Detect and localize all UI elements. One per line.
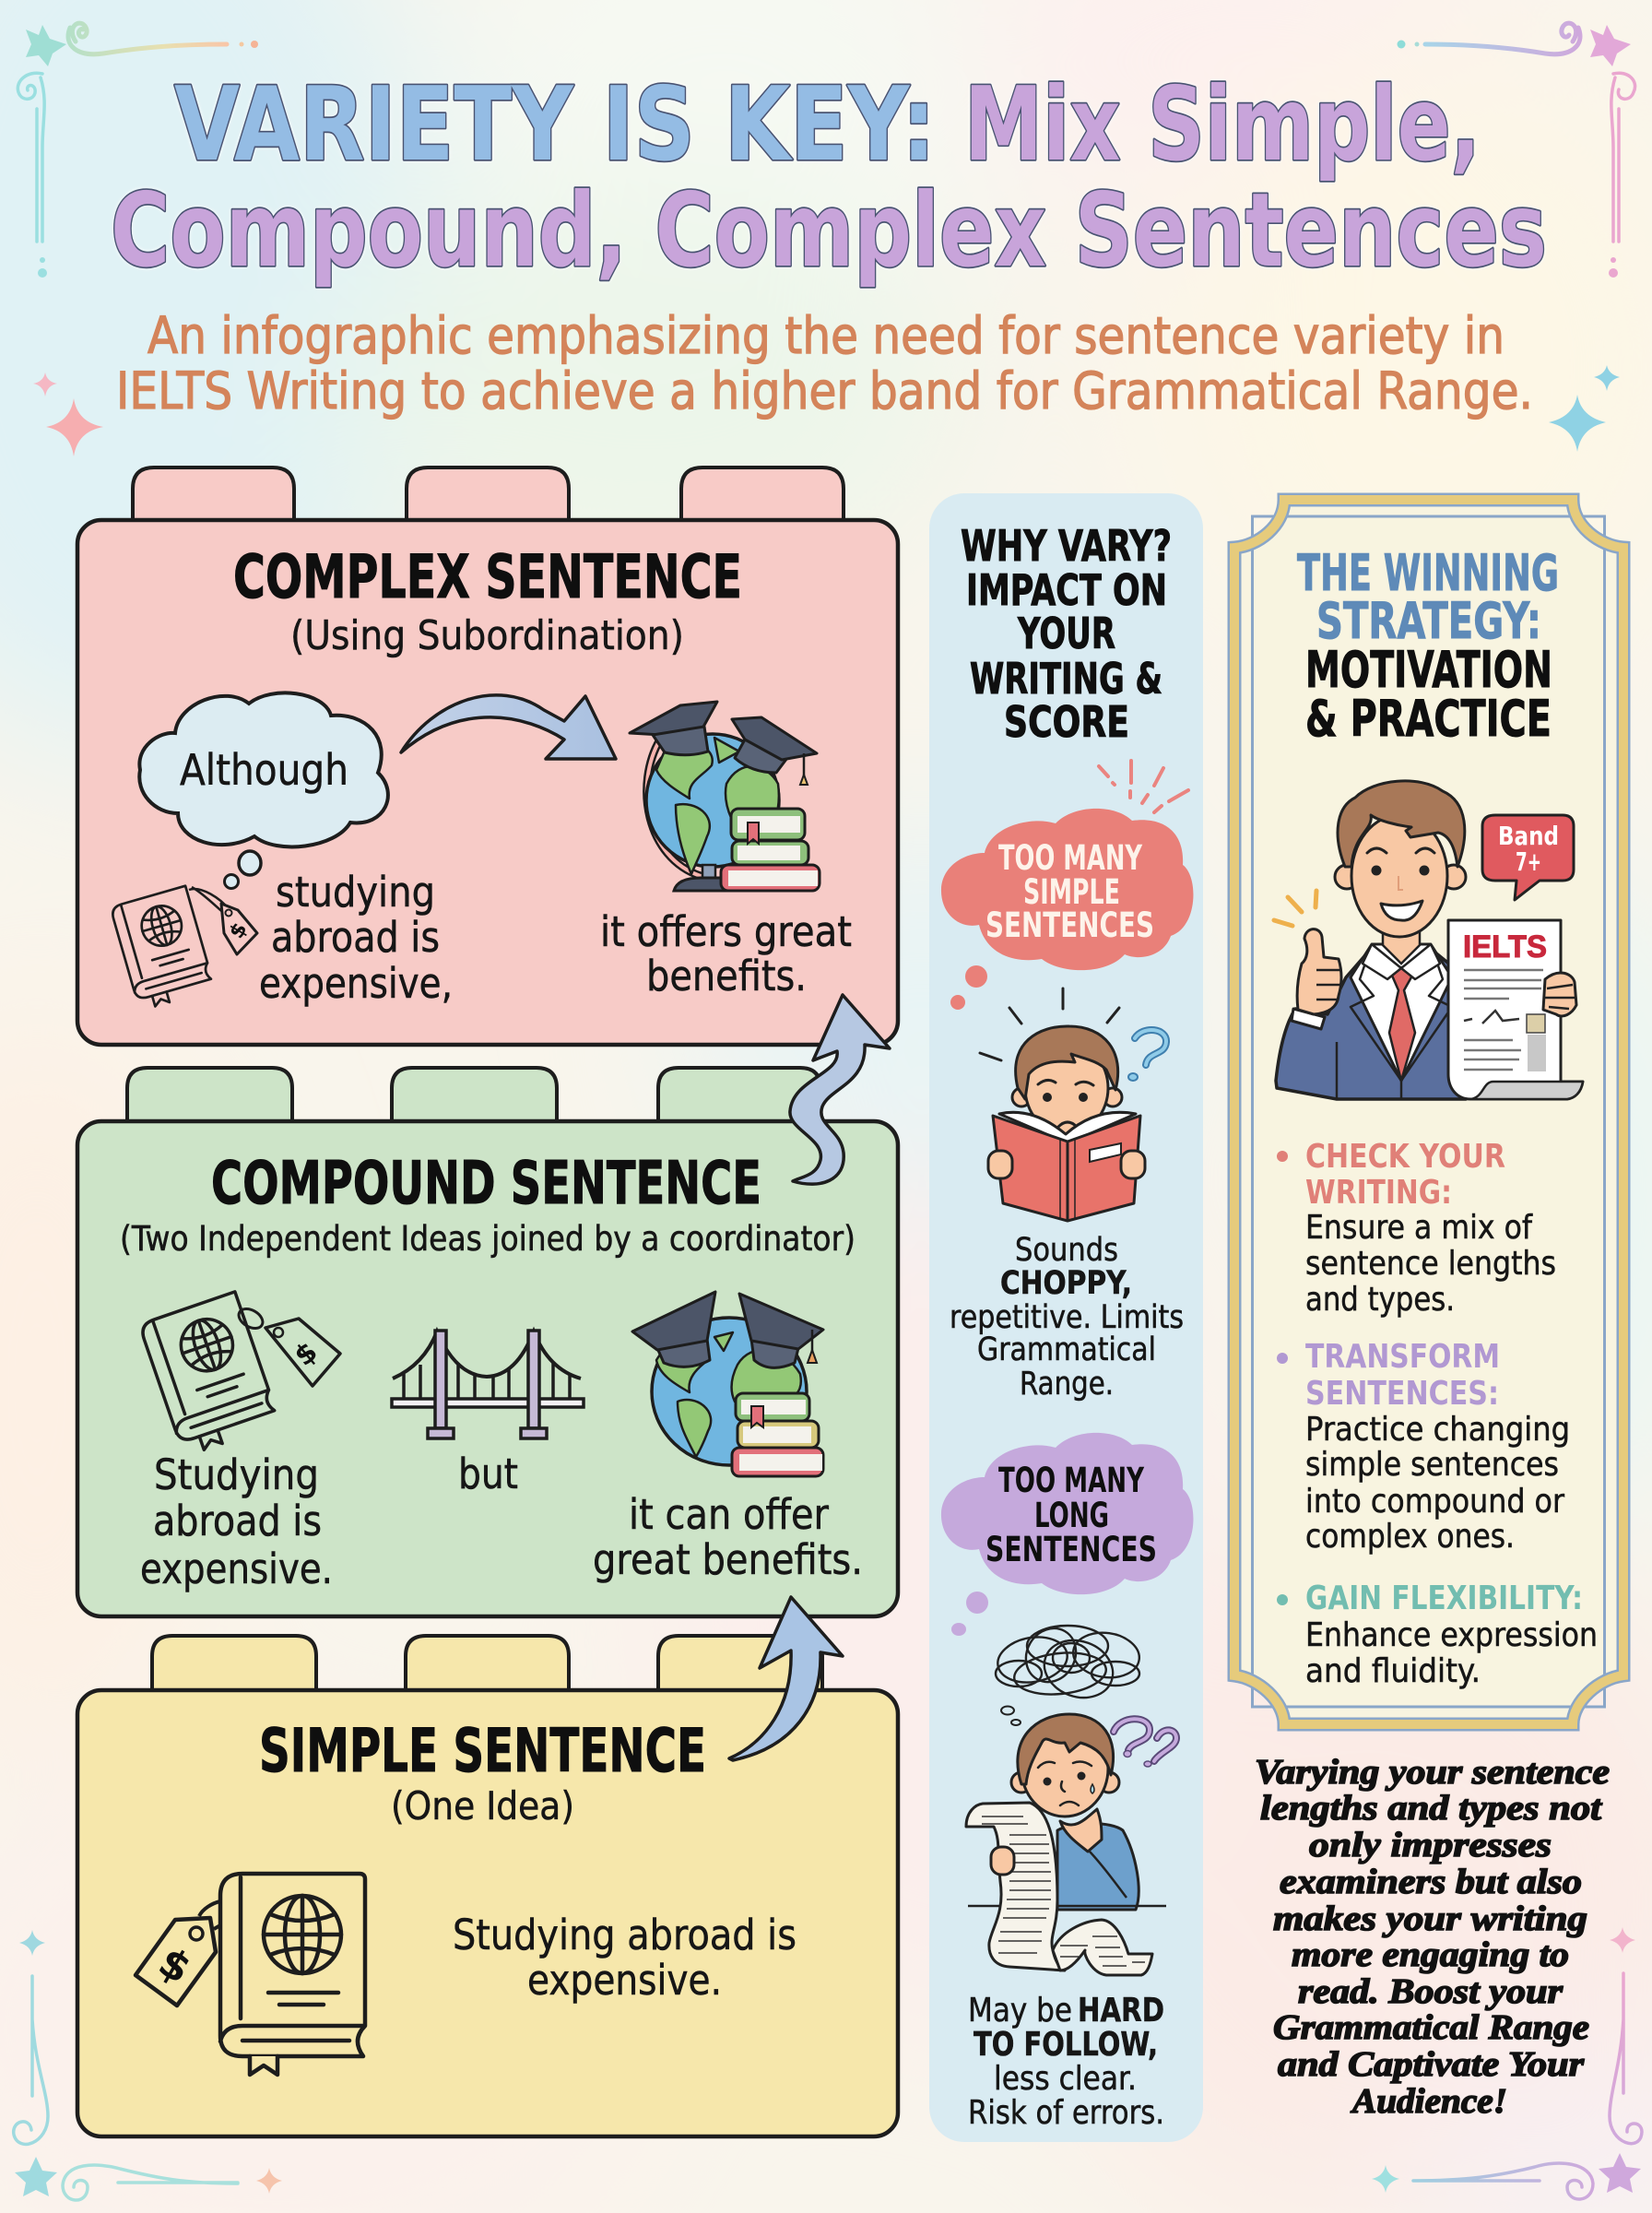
closing message: only impresses <box>1309 1826 1552 1864</box>
tip: transform sentences <box>1277 1338 1570 1556</box>
clause: studying abroad is expensive: expensive, <box>259 959 453 1008</box>
sentence: studying abroad is expensive <box>453 1911 796 2005</box>
why vary heading: IMPACT ON <box>966 565 1167 615</box>
closing message <box>1255 1753 1610 2121</box>
text: choppy effect: Sounds <box>1015 1232 1118 1269</box>
closing message: makes your writing <box>1273 1899 1587 1938</box>
icon: confused reader <box>980 988 1166 1221</box>
tip: gain flexibility <box>1277 1580 1598 1690</box>
panel: winning strategy <box>1234 500 1623 1724</box>
why vary heading <box>961 521 1172 747</box>
subtitle <box>116 306 1533 420</box>
clause: it can offer great benefits: great benefits. <box>593 1535 863 1584</box>
clause: studying abroad is expensive: abroad is <box>271 913 440 962</box>
icon: tangled scribble <box>994 1619 1142 1707</box>
clause: it offers great benefits: benefits. <box>646 952 807 1000</box>
tip: check your writing: CHECK YOUR <box>1305 1138 1505 1176</box>
text: choppy effect: repetitive. Limits <box>950 1299 1184 1336</box>
why vary heading: YOUR <box>1017 609 1115 658</box>
title <box>111 65 1547 290</box>
text: hard to follow effect: HARD <box>1078 1992 1164 2030</box>
cloud: too many simple sentences <box>941 809 1193 1010</box>
icon: passport with price tag: $ <box>225 919 253 942</box>
cloud: too many long sentences: SENTENCES <box>985 1530 1157 1569</box>
closing message: read. Boost your <box>1298 1972 1564 2011</box>
text: hard to follow effect: Risk of errors. <box>968 2094 1164 2132</box>
compound subheading: (Two Independent Ideas joined by a coordinator) <box>120 1219 856 1259</box>
tip: gain flexibility: GAIN FLEXIBILITY: <box>1305 1580 1583 1617</box>
text: hard to follow effect: May be <box>968 1992 1072 2030</box>
panel: complex sentence <box>77 467 898 1045</box>
closing message: and Captivate Your <box>1278 2045 1585 2084</box>
closing message: more engaging to <box>1292 1935 1569 1974</box>
simple heading: SIMPLE SENTENCE <box>259 1717 706 1786</box>
text: choppy effect: Range. <box>1020 1366 1114 1402</box>
clause: studying abroad is expensive: studying <box>276 868 435 917</box>
cloud: too many long sentences <box>941 1433 1193 1636</box>
why vary heading: SCORE <box>1004 697 1129 747</box>
arrow: simple to compound <box>729 1597 843 1760</box>
thought cloud: although <box>139 692 388 889</box>
tip: gain flexibility: Enhance expression <box>1305 1616 1598 1654</box>
complex subheading: (Using Subordination) <box>290 612 684 659</box>
tip: transform sentences: TRANSFORM <box>1305 1338 1500 1376</box>
complex heading: COMPLEX SENTENCE <box>233 543 742 612</box>
strategy heading: MOTIVATION <box>1305 641 1552 699</box>
clause: it can offer great benefits <box>593 1490 863 1584</box>
callout: band 7+: Band <box>1498 821 1559 851</box>
clause: studying abroad is expensive: abroad is <box>153 1497 322 1545</box>
simple subheading: (One Idea) <box>391 1783 574 1828</box>
panel: compound sentence <box>77 1068 898 1616</box>
text: choppy effect: CHOPPY, <box>1000 1265 1132 1302</box>
callout: band 7+ <box>1482 815 1574 900</box>
corner ornament: bottom left <box>14 1930 282 2200</box>
closing message: Grammatical Range <box>1273 2008 1589 2047</box>
sentence: studying abroad is expensive: Studying abroad is <box>453 1911 796 1959</box>
clause: it offers great benefits: it offers great <box>600 907 852 956</box>
clause: studying abroad is expensive <box>140 1450 333 1593</box>
closing message: examiners but also <box>1280 1863 1582 1901</box>
corner ornament: bottom right <box>1372 1927 1642 2199</box>
text: hard to follow effect: TO FOLLOW, <box>974 2026 1158 2064</box>
connector: but: but <box>458 1450 518 1498</box>
compound heading: COMPOUND SENTENCE <box>211 1150 761 1218</box>
arrow: compound to complex <box>790 995 890 1184</box>
cloud: too many simple sentences: SIMPLE <box>1023 872 1120 912</box>
sentence: studying abroad is expensive: expensive. <box>527 1956 722 2005</box>
tip: check your writing: Ensure a mix of <box>1305 1209 1533 1247</box>
icon: passport with price tag: $ <box>150 1938 198 1994</box>
icon: globe with caps and books <box>632 1292 823 1476</box>
title: Mix Simple, <box>964 65 1481 184</box>
strategy heading: & PRACTICE <box>1305 690 1552 748</box>
icon: passport with price tag <box>139 1292 340 1457</box>
strategy heading <box>1297 544 1559 748</box>
tip: check your writing <box>1277 1138 1556 1319</box>
tip: check your writing: and types. <box>1305 1281 1455 1319</box>
tip: transform sentences: complex ones. <box>1305 1518 1515 1556</box>
clause: studying abroad is expensive: expensive. <box>140 1544 333 1593</box>
icon: passport with price tag <box>136 1874 365 2075</box>
why vary heading: WRITING & <box>970 654 1162 704</box>
callout: band 7+: 7+ <box>1516 846 1541 877</box>
subtitle: An infographic emphasizing the need for sentence variety in <box>148 306 1504 365</box>
text: choppy effect <box>950 1232 1184 1402</box>
clause: it offers great benefits <box>600 907 852 1000</box>
tip: gain flexibility: and fluidity. <box>1305 1652 1481 1690</box>
panel: why vary <box>929 493 1203 2142</box>
tip: transform sentences: simple sentences <box>1305 1446 1559 1484</box>
cloud: too many simple sentences: SENTENCES <box>985 905 1154 945</box>
strategy heading: STRATEGY: <box>1316 592 1541 650</box>
why vary heading: WHY VARY? <box>961 521 1172 571</box>
closing message: Audience! <box>1351 2082 1507 2121</box>
clause: it can offer great benefits: it can offer <box>629 1490 829 1539</box>
icon: bridge <box>392 1331 584 1438</box>
clause: studying abroad is expensive <box>259 868 453 1008</box>
tip: transform sentences: Practice changing <box>1305 1411 1570 1449</box>
closing message: Varying your sentence <box>1255 1753 1610 1792</box>
sparkles: left of subtitle <box>33 373 103 456</box>
icon: worried reader with long scroll <box>966 1706 1176 1975</box>
sparkles: right of subtitle <box>1549 365 1620 452</box>
corner ornament: top right <box>1398 23 1635 278</box>
icon: passport with price tag <box>111 886 257 1011</box>
text: choppy effect: Grammatical <box>977 1331 1156 1368</box>
ornate frame <box>1234 500 1623 1724</box>
title: VARIETY IS KEY: <box>174 65 936 184</box>
cloud: too many long sentences: LONG <box>1034 1496 1109 1535</box>
closing message: lengths and types not <box>1260 1789 1603 1828</box>
tip: transform sentences: into compound or <box>1305 1483 1564 1521</box>
tip: check your writing: WRITING: <box>1305 1174 1452 1212</box>
tip: check your writing: sentence lengths <box>1305 1245 1556 1283</box>
text: hard to follow effect: less clear. <box>994 2060 1137 2098</box>
text: hard to follow effect <box>968 1992 1164 2132</box>
icon: globe with caps and books <box>630 702 820 891</box>
cloud: too many simple sentences: TOO MANY <box>998 838 1143 878</box>
emphasis marks <box>1099 761 1188 812</box>
clause: studying abroad is expensive: Studying <box>154 1450 319 1499</box>
thought cloud: although: Although <box>180 745 348 795</box>
icon: passport with price tag: $ <box>289 1336 324 1373</box>
corner ornament: top left <box>18 23 258 278</box>
panel: simple sentence <box>77 1636 898 2136</box>
icon: student with thumbs up and IELTS paper: IELTS <box>1463 929 1547 964</box>
tip: transform sentences: SENTENCES: <box>1305 1375 1499 1413</box>
cloud: too many long sentences: TOO MANY <box>998 1461 1145 1500</box>
icon: student with thumbs up and IELTS paper <box>1274 781 1583 1099</box>
arrow: cloud to globe <box>401 695 616 759</box>
